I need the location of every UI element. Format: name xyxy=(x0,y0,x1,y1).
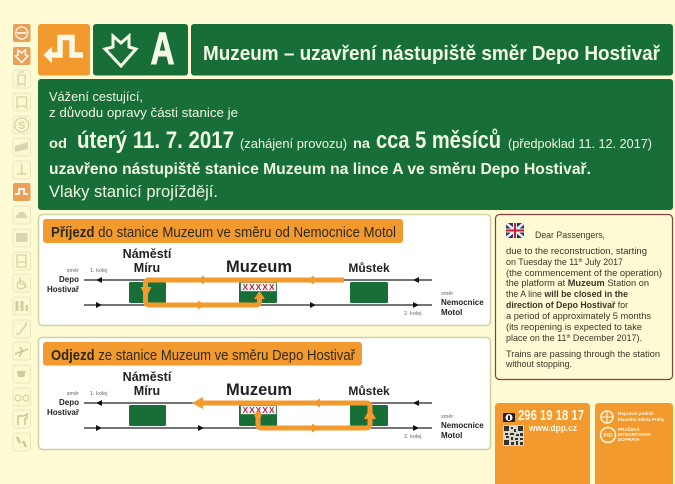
panel: English notice: the A line will be closed in the xyxy=(506,289,628,299)
panel: English notice: due to the reconstruction, starting xyxy=(506,246,647,256)
logo: PID: DOPRAVA xyxy=(618,437,641,442)
route arrow: departure xyxy=(192,397,376,432)
labels: departure diagram xyxy=(47,370,484,440)
panel: Czech announcement: Vlaky stanicí projíždějí. xyxy=(49,182,218,201)
panel: English notice: without stopping. xyxy=(505,359,572,369)
heading: departure xyxy=(43,342,362,366)
icon: train xyxy=(13,138,30,156)
icon: tram xyxy=(13,70,30,88)
icon: dog xyxy=(13,410,30,428)
labels: departure diagram: směr xyxy=(441,414,453,420)
labels: departure diagram: Nemocnice xyxy=(441,421,484,430)
labels: departure diagram: směr xyxy=(67,391,79,397)
panel: Czech announcement: (předpoklad 11. 12. 2017) xyxy=(508,136,652,151)
labels: arrival diagram: Nemocnice xyxy=(441,298,484,307)
route arrow: arrival xyxy=(140,276,344,310)
panel: English notice: July 2017 xyxy=(582,257,623,267)
labels: departure diagram: 2. kolej xyxy=(404,434,421,440)
labels: departure diagram: Náměstí xyxy=(123,370,172,384)
panel: Czech announcement: uzavřeno nástupiště stanice Muzeum na lince A ve směru Depo Hostivař. xyxy=(49,161,591,178)
icon: orange platform closure tile xyxy=(38,24,90,76)
labels: arrival diagram: 2. kolej xyxy=(404,311,421,317)
labels: arrival diagram: 1. kolej xyxy=(90,268,107,274)
panel: English notice: th xyxy=(578,258,583,264)
labels: arrival diagram: směr xyxy=(67,268,79,274)
icon: metro xyxy=(13,47,30,65)
title xyxy=(191,24,673,76)
panel: Czech announcement: od xyxy=(49,135,67,151)
icon: wheelchair xyxy=(13,274,30,292)
sidebar: category icons xyxy=(13,24,30,451)
tracks and stations xyxy=(84,400,432,431)
labels: arrival diagram: Motol xyxy=(441,308,462,317)
panel: English notice: a period of approximately 5 months xyxy=(506,311,651,321)
heading: arrival xyxy=(43,219,403,243)
panel: Czech announcement: (zahájení provozu) xyxy=(240,136,347,151)
icon: S-train: S xyxy=(18,120,25,132)
line badge: metro A: A xyxy=(150,23,174,74)
panel: English notice: the platform at Muzeum Station on xyxy=(506,278,649,288)
labels: departure diagram: Depo xyxy=(59,398,79,407)
icon: pram xyxy=(13,365,30,383)
panel: English notice: (the commencement of the operation) xyxy=(506,268,662,278)
panel: operator logos xyxy=(595,403,673,484)
panel: English notice: on Tuesday the 11 xyxy=(506,257,582,267)
panel: Czech announcement xyxy=(38,79,673,210)
panel: English notice: th xyxy=(566,334,571,340)
tracks and stations xyxy=(84,277,432,308)
panel: Czech announcement: Vážení cestující, xyxy=(49,89,143,104)
logo: Dopravní podnik: Dopravní podnik xyxy=(618,411,654,416)
tracks and stations: XXXXX xyxy=(242,282,275,292)
labels: arrival diagram: Hostivař xyxy=(47,285,80,294)
panel: English notice: December 2017). xyxy=(570,333,642,343)
heading: arrival: Příjezd do stanice Muzeum ve směru od Nemocnice Motol xyxy=(51,224,396,241)
panel: arrival diagram xyxy=(38,214,490,326)
panel: English notice: direction of Depo Hostivař for xyxy=(506,300,628,310)
icon: bicycle xyxy=(13,388,30,406)
heading: departure: Odjezd ze stanice Muzeum ve směru Depo Hostivař xyxy=(51,347,356,364)
panel: English notice: (its reopening is expected to take xyxy=(506,322,642,332)
labels: departure diagram: 1. kolej xyxy=(90,391,107,397)
labels: arrival diagram: Náměstí xyxy=(123,247,172,261)
icon: car xyxy=(13,206,30,224)
panel: Czech announcement: z důvodu opravy části stanice je xyxy=(49,105,238,120)
tracks and stations: XXXXX xyxy=(242,405,275,415)
title: Muzeum – uzavření nástupiště směr Depo Hostivař xyxy=(203,43,660,65)
labels: arrival diagram: Depo xyxy=(59,275,79,284)
logo: PID: PID xyxy=(603,433,613,439)
icon: UK flag xyxy=(506,223,524,238)
panel: departure diagram xyxy=(38,338,490,450)
panel: contact: www.dpp.cz xyxy=(528,423,577,433)
icon: plane xyxy=(13,342,30,360)
icon: transit operator logo xyxy=(13,24,30,42)
icon: S-train xyxy=(13,116,30,134)
labels: arrival diagram: Muzeum xyxy=(226,258,292,276)
line badge: metro A xyxy=(93,23,188,76)
icon: escalator xyxy=(13,320,30,338)
panel: English notice: place on the 11 xyxy=(506,333,569,343)
logo: Dopravní podnik xyxy=(600,411,665,423)
logo: PID xyxy=(600,425,652,442)
logo: PID: INTEGROVANÁ xyxy=(618,431,652,437)
labels: arrival diagram: Můstek xyxy=(348,261,390,275)
icon: footprints xyxy=(13,433,30,451)
panel: contact: 296 19 18 17 xyxy=(518,407,584,424)
labels: departure diagram: Muzeum xyxy=(226,381,292,399)
panel: English notice: Dear Passengers, xyxy=(535,230,605,240)
labels: arrival diagram xyxy=(47,247,484,317)
icon: bus xyxy=(13,93,30,111)
panel: Czech announcement: úterý 11. 7. 2017 xyxy=(77,127,234,154)
panel: Czech announcement: na xyxy=(353,135,370,151)
labels: departure diagram: Motol xyxy=(441,431,462,440)
icon: platform closure, active xyxy=(13,183,30,201)
labels: departure diagram: Míru xyxy=(134,384,160,398)
labels: departure diagram: Můstek xyxy=(348,384,390,398)
labels: departure diagram: Hostivař xyxy=(47,408,80,417)
panel: English notice xyxy=(496,214,672,380)
labels: arrival diagram: směr xyxy=(441,291,453,297)
icon: QR code xyxy=(503,425,524,446)
icon: ticket machine xyxy=(13,252,30,270)
panel: contact xyxy=(495,403,590,484)
panel: English notice: Trains are passing through the station xyxy=(506,349,660,359)
icon: ferry anchor xyxy=(13,161,30,179)
panel: Czech announcement: cca 5 měsíců xyxy=(376,127,501,154)
icon: family xyxy=(13,297,30,315)
icon: ticket xyxy=(13,229,30,247)
icon: information xyxy=(503,413,515,422)
logo: Dopravní podnik: hlavního města Prahy xyxy=(618,417,665,422)
labels: arrival diagram: Míru xyxy=(134,261,160,275)
logo: PID: PRAŽSKÁ xyxy=(618,425,641,432)
